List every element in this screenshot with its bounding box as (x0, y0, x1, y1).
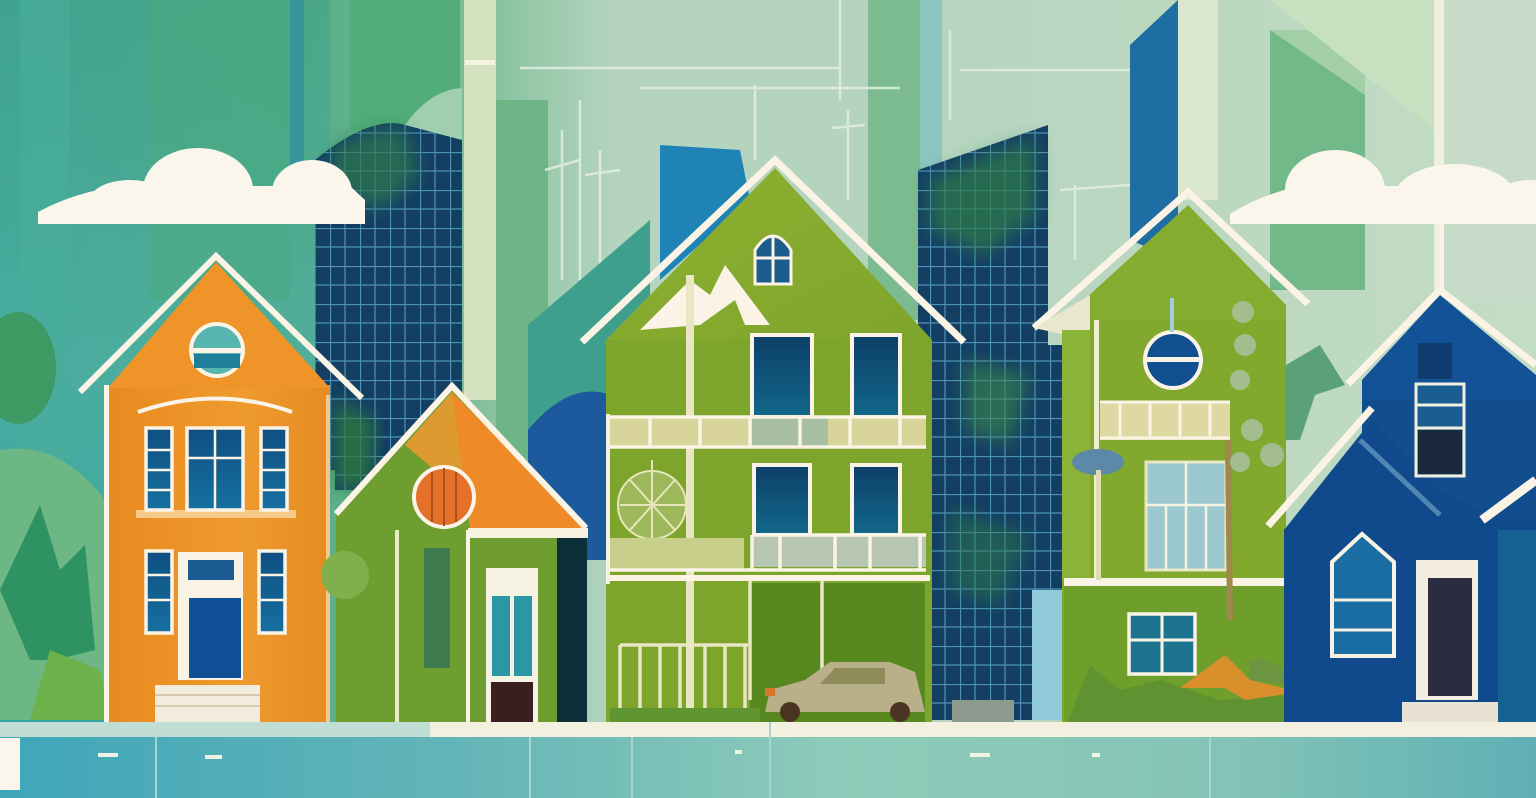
cloud right (1230, 150, 1536, 224)
wind turbines and thin grid lines (520, 0, 1130, 280)
solar panel (1072, 449, 1124, 475)
water ground strip (0, 722, 1536, 798)
pale dome behind tower (405, 88, 462, 140)
door (178, 552, 243, 680)
plant right of green house (1286, 345, 1345, 440)
balcony (1100, 402, 1230, 440)
roof notch (640, 265, 770, 330)
house: green right (1034, 192, 1308, 722)
house: orange tall (80, 256, 362, 722)
gable window (1332, 534, 1394, 656)
dark glass tower left (315, 123, 462, 490)
teal building behind green house (528, 220, 650, 520)
house: blue front (1268, 408, 1536, 722)
door (1416, 560, 1478, 700)
upper window of blue back house (1416, 384, 1464, 476)
round window (191, 324, 243, 376)
left tinted wash (0, 0, 330, 730)
blue hill (528, 392, 610, 560)
mid windows (754, 465, 810, 535)
house: large green (582, 160, 964, 722)
background towers (20, 0, 1536, 500)
orange bird shape (1180, 655, 1300, 700)
cloud left (38, 148, 365, 232)
lower window (1129, 614, 1195, 674)
sapling (1228, 440, 1230, 620)
car (765, 662, 925, 722)
porch (750, 583, 925, 722)
ground foliage (1068, 665, 1286, 722)
grey block base (952, 700, 1014, 722)
blue tower top behind green house (660, 145, 750, 280)
round window (1145, 332, 1201, 388)
attic window (754, 236, 792, 284)
light blue strip (1032, 590, 1066, 720)
house: small orange-green (321, 386, 588, 722)
dark glass tower centre (918, 125, 1062, 720)
lower balcony (610, 538, 744, 570)
big window (1146, 462, 1226, 570)
upper balcony (608, 417, 926, 447)
upper windows (146, 428, 287, 633)
cornice (138, 398, 292, 412)
door (486, 568, 538, 722)
steps (155, 685, 260, 722)
lower green (1064, 586, 1286, 722)
upper windows (752, 335, 812, 417)
foliage left (0, 312, 110, 720)
house: blue back (1348, 225, 1536, 722)
